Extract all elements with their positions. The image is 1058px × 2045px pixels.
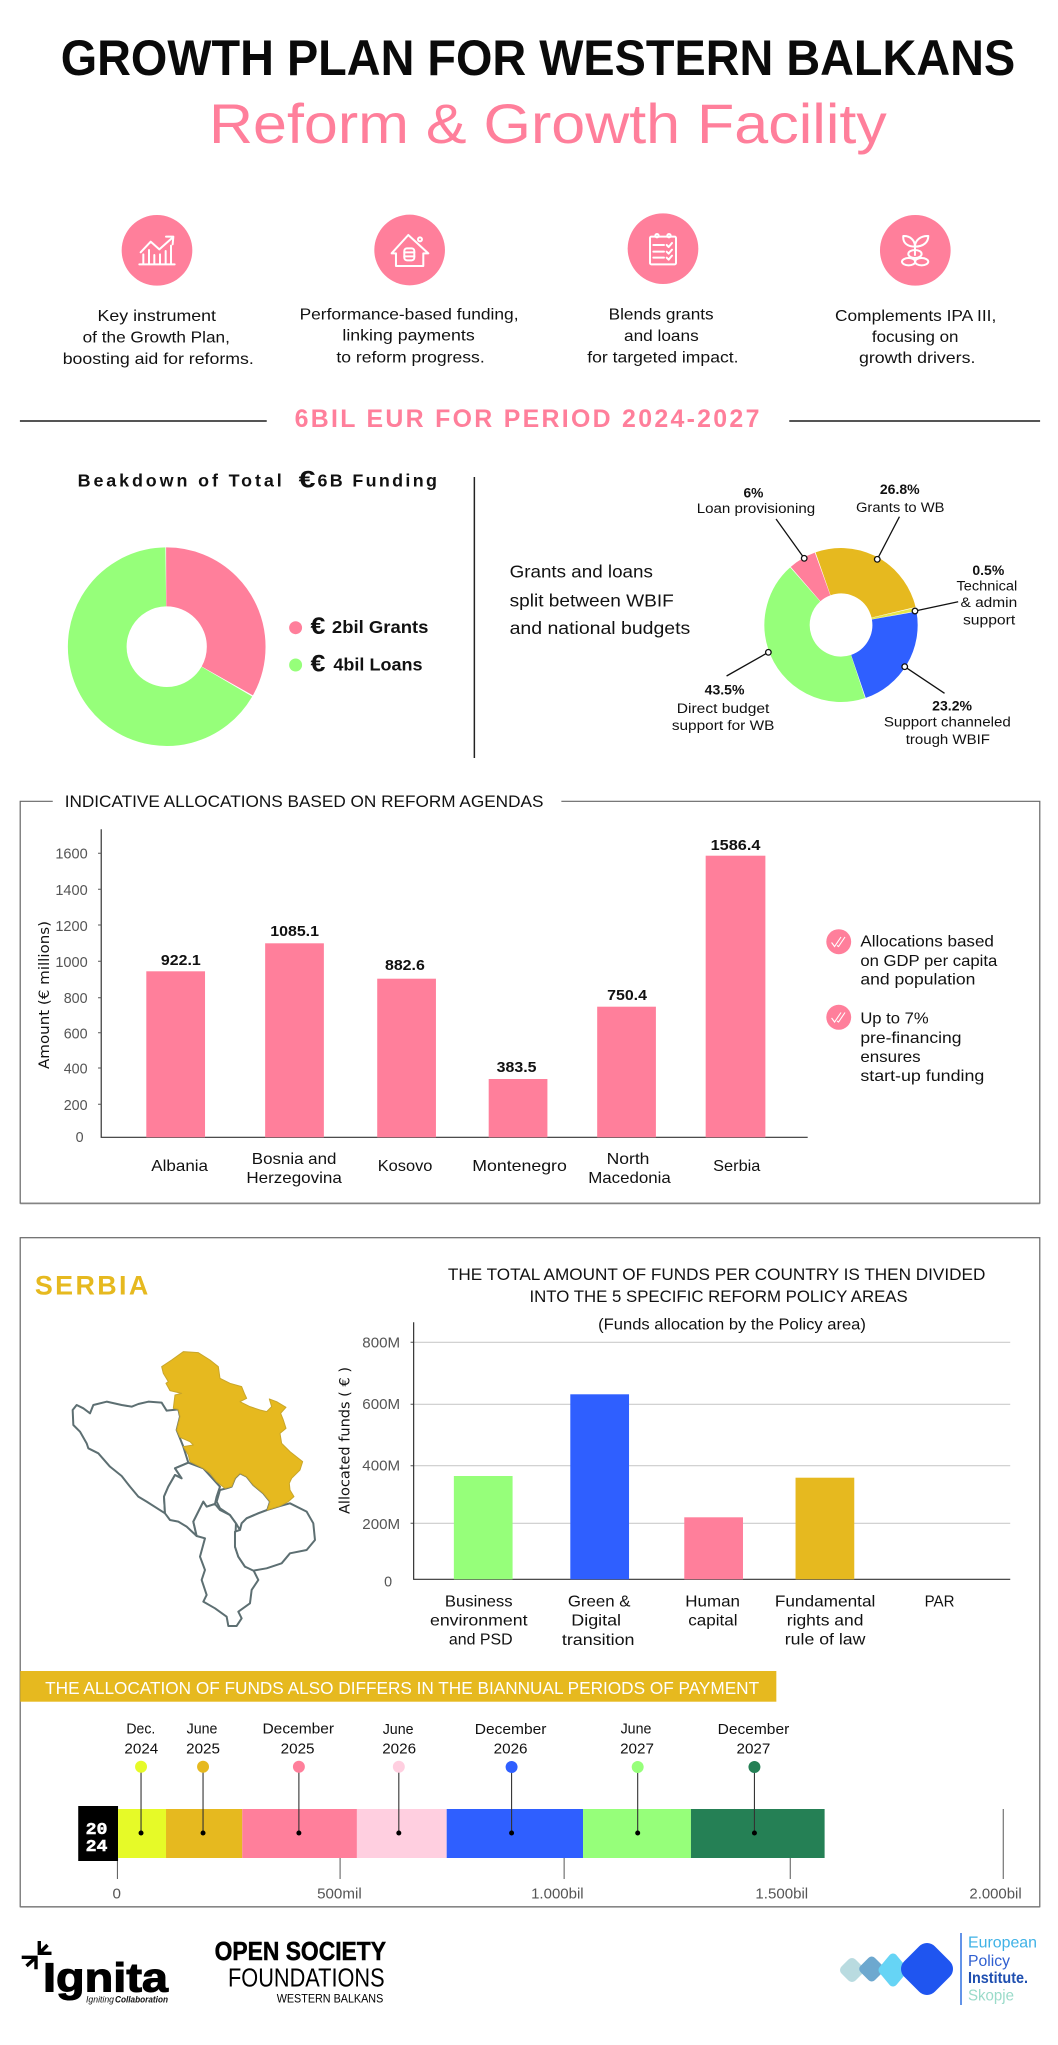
logo: European Policy Institute: Skopje xyxy=(968,1988,1014,2005)
panel: indicative allocations xyxy=(20,792,1040,1204)
timeline: payment periods: 2025 xyxy=(281,1740,315,1757)
text block: complements IPA III: Complements IPA III, xyxy=(835,308,996,325)
callouts: funding split: & admin xyxy=(960,594,1017,610)
bar chart: allocations by country: 600 xyxy=(64,1026,88,1043)
heading: breakdown of total funding: Beakdown of Total xyxy=(78,471,282,491)
text block: blends grants xyxy=(587,306,739,367)
bar chart: funds by policy area: Human xyxy=(685,1594,740,1611)
text block: complements IPA III xyxy=(835,308,996,367)
timeline: payment periods: 2026 xyxy=(494,1740,528,1757)
bar chart: allocations by country: 200 xyxy=(64,1098,88,1114)
bar chart: funds by policy area: PAR xyxy=(925,1594,954,1611)
bar chart: allocations by country: North xyxy=(607,1151,649,1168)
legend: grants and loans: € xyxy=(311,650,325,678)
logo: Open Society Foundations: FOUNDATIONS xyxy=(228,1963,385,1993)
bar chart: allocations by country: 882.6 xyxy=(385,957,425,974)
timeline: payment periods: 1.000bil xyxy=(531,1886,584,1902)
bar chart: allocations by country: 1586.4 xyxy=(711,837,761,854)
bar chart: allocations by country: 922.1 xyxy=(161,952,201,969)
heading: breakdown of total funding: € xyxy=(299,466,316,494)
callouts: funding split: Grants to WB xyxy=(856,499,945,515)
bar chart: funds by policy area: 600M xyxy=(362,1397,400,1413)
logo: European Policy Institute: Institute. xyxy=(968,1970,1028,1987)
bar chart: funds by policy area: capital xyxy=(688,1613,738,1630)
logo: Open Society Foundations: WESTERN BALKANS xyxy=(277,1992,383,2006)
bar chart: funds by policy area: environment xyxy=(430,1613,528,1630)
logo: Open Society Foundations: OPEN SOCIETY xyxy=(215,1936,386,1966)
donut chart: grants and loans xyxy=(72,551,262,742)
text block: blends grants: for targeted impact. xyxy=(587,350,739,367)
logo: Ignita: Igniting xyxy=(86,1995,114,2005)
timeline: payment periods: 2025 xyxy=(186,1740,220,1757)
callouts: funding split: 0.5% xyxy=(972,562,1005,578)
text block: grants and loans split: split between WBIF xyxy=(510,591,674,611)
text block: blends grants: and loans xyxy=(624,328,699,345)
icon: plant on coins xyxy=(880,215,951,286)
title: GROWTH PLAN FOR WESTERN BALKANS xyxy=(61,30,1015,86)
text block: grants and loans split: and national budgets xyxy=(510,618,691,638)
callout: pre-financing: start-up funding xyxy=(860,1068,984,1085)
callout: pre-financing xyxy=(826,1005,984,1085)
bar chart: funds by policy area: Business xyxy=(445,1594,513,1611)
callout: allocations based on GDP: and population xyxy=(860,972,975,989)
bar chart: funds by policy area: 200M xyxy=(362,1517,400,1533)
bar chart: funds by policy area xyxy=(337,1322,1010,1649)
bar chart: allocations by country: Bosnia and xyxy=(252,1151,336,1168)
timeline: payment periods: December xyxy=(262,1720,334,1737)
timeline: payment periods: 500mil xyxy=(317,1886,362,1902)
heading: funds per policy area: THE TOTAL AMOUNT OF FUNDS PER COUNTRY IS THEN DIVIDED xyxy=(448,1265,985,1284)
timeline: payment periods: June xyxy=(383,1721,414,1738)
callout: pre-financing: ensures xyxy=(860,1049,921,1066)
bar chart: funds by policy area: 800M xyxy=(362,1336,400,1352)
text block: key instrument: Key instrument xyxy=(98,308,217,325)
logo: European Policy Institute: European xyxy=(968,1935,1037,1952)
icon: 2024 block: 20 xyxy=(86,1821,107,1840)
legend: grants and loans: 4bil Loans xyxy=(333,655,423,675)
bar chart: funds by policy area: and PSD xyxy=(449,1631,513,1648)
bar chart: allocations by country: 1200 xyxy=(55,919,88,935)
bar chart: allocations by country xyxy=(37,829,808,1187)
text block: key instrument: of the Growth Plan, xyxy=(83,330,230,347)
icon: 2024 block: 24 xyxy=(86,1838,107,1857)
callouts: funding split xyxy=(672,481,1017,747)
heading: funds per policy area: (Funds allocation by the Policy area) xyxy=(598,1316,866,1333)
timeline: payment periods: June xyxy=(187,1720,217,1737)
icon: 2024 block xyxy=(78,1806,118,1861)
bar chart: allocations by country: Montenegro xyxy=(472,1158,567,1175)
timeline: payment periods: December xyxy=(718,1721,789,1738)
bar chart: allocations by country: 800 xyxy=(64,991,88,1007)
legend: grants and loans xyxy=(289,613,428,678)
donut chart: funding split xyxy=(765,548,917,702)
section heading: 6bil EUR: 6BIL EUR FOR PERIOD 2024-2027 xyxy=(295,405,759,433)
callouts: funding split: support xyxy=(963,612,1015,628)
logo: Ignita: Collaboration xyxy=(115,1995,168,2005)
callouts: funding split: Direct budget xyxy=(677,700,769,716)
bar chart: funds by policy area: Fundamental xyxy=(775,1594,875,1611)
subtitle: Reform & Growth Facility xyxy=(209,92,887,155)
text block: performance-based funding xyxy=(300,306,519,367)
bar chart: allocations by country: 1000 xyxy=(55,955,88,971)
timeline: payment periods: 2026 xyxy=(382,1740,416,1757)
callouts: funding split: Loan provisioning xyxy=(697,500,815,516)
timeline: payment periods: 2027 xyxy=(737,1740,770,1757)
bar chart: funds by policy area: Digital xyxy=(571,1613,621,1630)
timeline: payment periods: 2024 xyxy=(124,1740,158,1757)
heading: funds per policy area: INTO THE 5 SPECIFIC REFORM POLICY AREAS xyxy=(529,1287,908,1306)
bar chart: allocations by country: Herzegovina xyxy=(246,1170,342,1187)
heading: indicative allocations: INDICATIVE ALLOCATIONS BASED ON REFORM AGENDAS xyxy=(65,792,543,811)
heading: breakdown of total funding: 6B Funding xyxy=(318,471,437,491)
bar chart: allocations by country: 383.5 xyxy=(497,1059,536,1076)
logo: Ignita: Ignita xyxy=(43,1955,169,2001)
timeline: payment periods: 0 xyxy=(112,1886,121,1902)
timeline: payment periods: 2027 xyxy=(620,1740,654,1757)
heading: funds per policy area xyxy=(448,1265,985,1333)
bar chart: funds by policy area: rule of law xyxy=(785,1631,866,1648)
callouts: funding split: trough WBIF xyxy=(906,731,990,747)
text block: performance-based funding: linking payments xyxy=(342,328,475,345)
bar chart: allocations by country: Kosovo xyxy=(378,1158,433,1175)
heading: breakdown of total funding xyxy=(78,466,437,494)
banner: biannual periods xyxy=(20,1671,776,1702)
bar chart: funds by policy area: rights and xyxy=(787,1613,863,1630)
bar chart: allocations by country: Amount (€ millions) xyxy=(37,921,53,1069)
logo: European Policy Institute: Policy xyxy=(968,1953,1010,1970)
icon: checklist xyxy=(628,213,698,284)
bar chart: allocations by country: 1400 xyxy=(55,883,88,899)
bar chart: allocations by country: 1085.1 xyxy=(270,923,319,940)
timeline: payment periods: 1.500bil xyxy=(755,1886,808,1902)
callouts: funding split: 43.5% xyxy=(705,681,745,697)
callouts: funding split: 26.8% xyxy=(880,481,920,497)
legend: grants and loans: € xyxy=(311,613,325,640)
text block: key instrument xyxy=(63,308,254,368)
logo: European Policy Institute xyxy=(845,1933,1037,2005)
text block: blends grants: Blends grants xyxy=(609,306,714,324)
timeline: payment periods: June xyxy=(621,1720,651,1737)
text block: performance-based funding: Performance-based funding, xyxy=(300,306,519,324)
callouts: funding split: support for WB xyxy=(672,717,774,733)
callout: pre-financing: pre-financing xyxy=(860,1030,961,1047)
callout: allocations based on GDP xyxy=(826,929,997,989)
heading: Serbia: SERBIA xyxy=(35,1270,148,1300)
bar chart: allocations by country: Albania xyxy=(151,1158,208,1175)
bar chart: funds by policy area: transition xyxy=(562,1632,635,1649)
banner: biannual periods: THE ALLOCATION OF FUNDS ALSO DIFFERS IN THE BIANNUAL PERIODS OF PAYMENT xyxy=(45,1678,759,1698)
bar chart: allocations by country: 400 xyxy=(64,1061,88,1078)
timeline: payment periods xyxy=(78,1720,1022,1902)
icon: house with coins xyxy=(374,215,445,285)
bar chart: allocations by country: 750.4 xyxy=(607,987,648,1004)
text block: grants and loans split: Grants and loans xyxy=(510,562,653,582)
bar chart: funds by policy area: Allocated funds ( € ) xyxy=(337,1367,353,1514)
callouts: funding split: Technical xyxy=(956,578,1017,594)
logo: Ignita xyxy=(22,1941,169,2005)
text block: complements IPA III: growth drivers. xyxy=(859,350,975,367)
callout: allocations based on GDP: Allocations based xyxy=(860,934,994,951)
bar chart: allocations by country: Serbia xyxy=(713,1158,761,1175)
callout: allocations based on GDP: on GDP per capita xyxy=(860,953,997,970)
panel: Serbia xyxy=(20,1238,1040,1907)
legend: grants and loans: 2bil Grants xyxy=(332,617,428,637)
bar chart: funds by policy area: Green & xyxy=(568,1594,631,1611)
bar chart: allocations by country: 0 xyxy=(76,1130,84,1146)
callouts: funding split: 23.2% xyxy=(932,698,973,714)
bar chart: allocations by country: 1600 xyxy=(55,846,88,863)
logo: Open Society Foundations xyxy=(215,1936,386,2006)
icon: growth chart xyxy=(122,215,192,286)
bar chart: funds by policy area: 0 xyxy=(384,1575,392,1591)
map of Western Balkans with Serbia highlighted xyxy=(73,1352,315,1626)
bar chart: allocations by country: Macedonia xyxy=(588,1170,671,1187)
text block: complements IPA III: focusing on xyxy=(872,329,958,346)
callout: pre-financing: Up to 7% xyxy=(860,1011,929,1028)
timeline: payment periods: December xyxy=(475,1721,546,1738)
timeline: payment periods: Dec. xyxy=(126,1720,155,1737)
bar chart: funds by policy area: 400M xyxy=(362,1459,400,1475)
icons row xyxy=(122,213,951,286)
callouts: funding split: 6% xyxy=(743,485,764,501)
timeline: payment periods: 2.000bil xyxy=(969,1886,1022,1902)
text block: grants and loans split xyxy=(510,562,691,638)
text block: key instrument: boosting aid for reforms. xyxy=(63,351,254,368)
text block: performance-based funding: to reform progress. xyxy=(336,350,485,367)
callouts: funding split: Support channeled xyxy=(884,714,1011,730)
